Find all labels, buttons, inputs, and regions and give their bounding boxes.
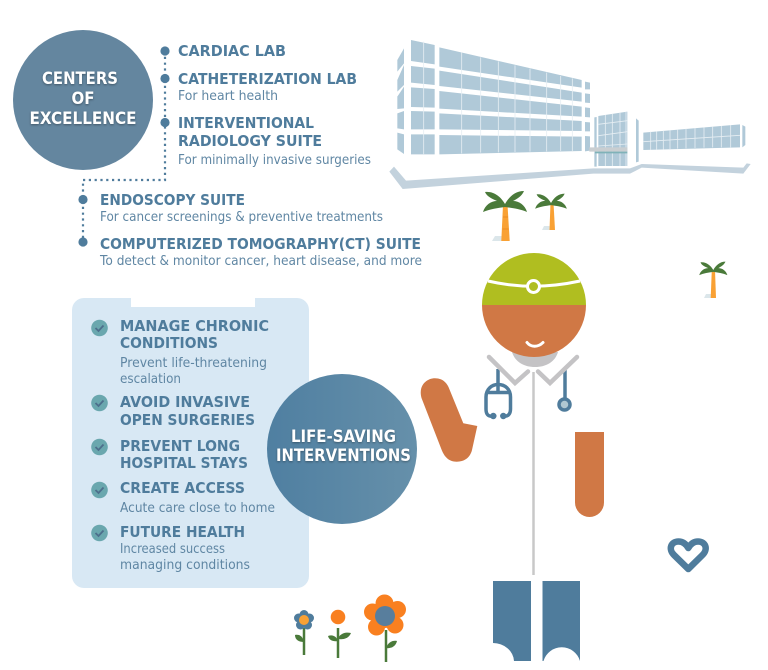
panel: centers of excellence list	[13, 30, 422, 269]
list item: interventional radiology suite: INTERVENTIONAL	[178, 114, 314, 132]
timeline connector	[78, 46, 170, 247]
benefit: prevent long hospital stays: HOSPITAL STAYS	[120, 454, 248, 472]
benefit: avoid invasive open surgeries: OPEN SURGERIES	[120, 411, 255, 429]
benefit: avoid invasive open surgeries: AVOID INVASIVE	[120, 393, 250, 411]
benefit: create access: Acute care close to home	[120, 500, 275, 516]
benefit: create access	[91, 479, 275, 516]
panel: life-saving benefits	[72, 298, 309, 588]
illustration: hospital building	[389, 40, 751, 189]
icon: heart	[671, 542, 706, 569]
benefit: future health	[91, 523, 250, 573]
right trouser leg	[542, 581, 580, 661]
list item: computerized tomography suite: COMPUTERIZED TOMOGRAPHY(CT) SUITE	[100, 235, 421, 253]
right arm	[575, 432, 604, 517]
list item: endoscopy suite	[100, 191, 383, 225]
icon: large palm tree	[483, 191, 527, 241]
benefit: avoid invasive open surgeries	[91, 393, 255, 429]
list item: catheterization lab	[178, 70, 357, 104]
benefit: prevent long hospital stays	[91, 437, 248, 472]
coat seam	[532, 372, 535, 575]
benefit: future health: FUTURE HEALTH	[120, 523, 245, 541]
badge: centers of excellence: OF	[72, 89, 94, 108]
list item: cardiac lab: CARDIAC LAB	[178, 42, 286, 60]
benefit: create access: CREATE ACCESS	[120, 479, 245, 497]
icon: orange bud flower	[328, 610, 351, 658]
list item: interventional radiology suite	[178, 114, 371, 168]
benefit: prevent long hospital stays: PREVENT LONG	[120, 437, 240, 455]
left trouser leg	[493, 581, 531, 661]
icon: small palm tree	[535, 194, 567, 230]
benefit: future health: Increased success	[120, 541, 225, 557]
neck	[512, 352, 558, 367]
illustration: doctor	[421, 253, 604, 661]
badge: life-saving interventions	[267, 374, 417, 524]
benefit: manage chronic conditions: Prevent life-threatening	[120, 355, 267, 371]
benefit: manage chronic conditions: CONDITIONS	[120, 334, 218, 352]
list item: catheterization lab: For heart health	[178, 88, 278, 104]
list item: endoscopy suite: For cancer screenings & preventive treatments	[100, 209, 383, 225]
head	[482, 253, 586, 357]
benefit: manage chronic conditions: MANAGE CHRONIC	[120, 317, 269, 335]
list item: interventional radiology suite: RADIOLOGY SUITE	[178, 132, 322, 150]
collar	[489, 357, 577, 383]
badge: life-saving interventions: LIFE-SAVING	[291, 427, 396, 446]
left arm	[421, 378, 477, 462]
list item: interventional radiology suite: For minimally invasive surgeries	[178, 152, 371, 168]
icon: small blue flower	[294, 610, 314, 655]
badge: centers of excellence	[13, 30, 153, 170]
benefit: manage chronic conditions	[91, 317, 269, 387]
list item: computerized tomography suite	[99, 235, 422, 269]
list item: computerized tomography suite: To detect & monitor cancer, heart disease, and more	[99, 253, 422, 269]
list item: endoscopy suite: ENDOSCOPY SUITE	[100, 191, 245, 209]
list item: catheterization lab: CATHETERIZATION LAB	[178, 70, 357, 88]
benefit: manage chronic conditions: escalation	[120, 371, 181, 387]
badge: centers of excellence: EXCELLENCE	[30, 109, 136, 128]
icon: distant palm tree	[699, 262, 727, 298]
benefit: future health: managing conditions	[120, 557, 250, 573]
badge: centers of excellence: CENTERS	[42, 69, 118, 88]
icon: large orange flower	[364, 594, 406, 662]
badge: life-saving interventions: INTERVENTIONS	[276, 446, 411, 465]
stethoscope	[486, 369, 570, 418]
